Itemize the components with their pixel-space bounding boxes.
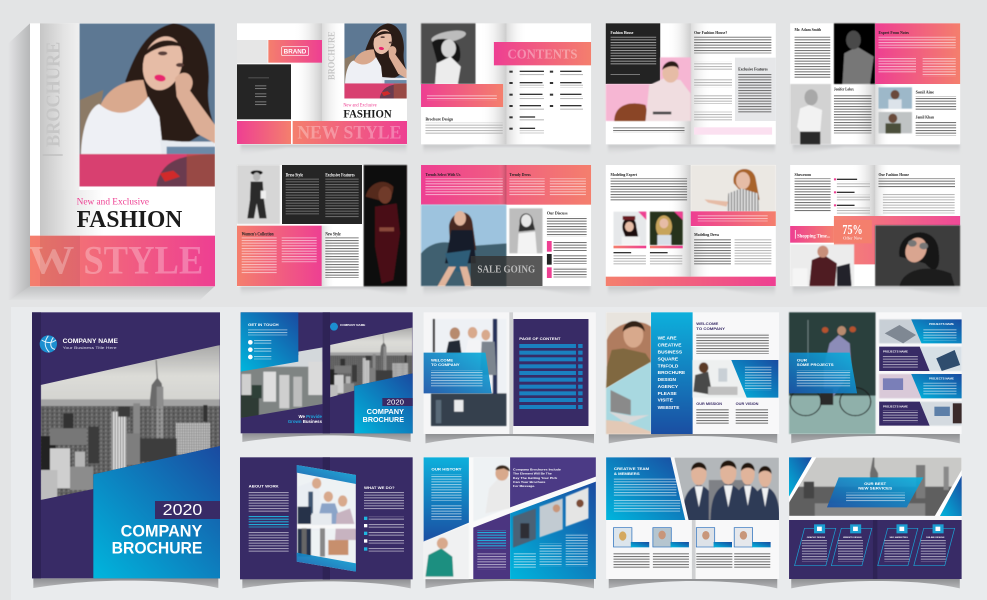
year block — [155, 501, 220, 519]
body text — [611, 178, 687, 201]
white article text: New Style — [325, 232, 341, 237]
left city photo — [241, 347, 323, 418]
left gradient band — [237, 121, 291, 144]
slogan: We Provide — [298, 414, 323, 419]
cover shadow — [8, 23, 215, 300]
contents rows — [519, 344, 583, 409]
page — [606, 457, 779, 579]
gradient band — [30, 236, 215, 286]
about work text: ABOUT WORK — [249, 485, 279, 489]
shopper photo — [790, 244, 854, 286]
band text: NEW STYLE — [297, 122, 401, 143]
project tile three: PROJECTS NAME — [929, 377, 954, 381]
subtitle: New and Exclusive — [343, 104, 377, 109]
purple top panel: Key The Getting Your Pick — [513, 476, 558, 480]
company name: COMPANY NAME — [63, 339, 118, 345]
year block: 2020 — [163, 502, 202, 519]
year block: 2020 — [387, 400, 404, 407]
dark model photo — [364, 165, 407, 286]
intro text — [795, 37, 830, 78]
spread: we are creative — [606, 312, 779, 443]
model card two bar — [650, 246, 683, 248]
blue overlay — [424, 353, 492, 393]
spread: projects — [789, 312, 962, 443]
company name — [63, 339, 118, 350]
column text: TRIFOLD — [658, 364, 679, 368]
project tile four — [879, 402, 962, 426]
blue lower panel — [510, 482, 596, 579]
year block — [382, 398, 413, 407]
slogan: Grown Business — [288, 419, 323, 424]
fashion house text — [878, 172, 955, 213]
dark article panel — [282, 165, 362, 224]
tab items — [547, 241, 587, 278]
woman and car photo — [421, 205, 506, 286]
fold shading — [293, 23, 344, 121]
fold — [668, 165, 711, 277]
cover photo — [79, 23, 215, 187]
brand block: BRAND — [284, 48, 307, 55]
blue overlay — [789, 353, 857, 393]
man at board photo — [473, 457, 510, 522]
page — [424, 312, 596, 434]
fold — [873, 520, 877, 579]
column text: SQUARE — [658, 357, 678, 361]
subtitle: New and Exclusive — [77, 197, 149, 208]
welcome text — [696, 333, 769, 354]
spine — [32, 312, 41, 578]
shadow — [423, 286, 590, 297]
top-left corner — [789, 457, 812, 497]
discount box: Offer Now — [843, 236, 863, 240]
mission and vision — [696, 402, 768, 424]
quote — [613, 127, 685, 133]
service one: GRAPHIC DESIGN — [807, 536, 826, 539]
page — [790, 23, 960, 144]
about text — [425, 123, 503, 134]
column text: BUSINESS — [658, 350, 682, 354]
title: BROCHURE — [363, 417, 404, 424]
welcome text: TO COMPANY — [431, 363, 460, 367]
blue contact panel — [241, 312, 298, 372]
purple top panel: Company Brochures Include — [513, 467, 561, 471]
mission and vision: OUR MISSION — [696, 402, 723, 406]
fold — [480, 23, 527, 144]
title — [112, 522, 202, 558]
model card one — [614, 212, 646, 245]
project tile two: PROJECTS NAME — [883, 349, 908, 353]
people photo — [606, 312, 651, 434]
office photo — [297, 465, 356, 572]
column text — [658, 336, 685, 410]
laptop photo — [606, 362, 651, 434]
pink band — [834, 216, 960, 264]
heading: Modeling Expert — [611, 172, 637, 177]
heading: Our Fashion House? — [694, 30, 727, 35]
page — [789, 312, 962, 434]
model card two — [650, 212, 683, 245]
fashion brochure group — [8, 23, 960, 300]
column text: WE ARE — [658, 336, 677, 341]
gradient panel: Expert From Notes — [878, 30, 909, 35]
project tile one: PROJECTS NAME — [929, 322, 954, 326]
title FASHION: FASHION — [77, 206, 183, 233]
column text: VISITE — [658, 398, 673, 403]
top-left white stripe — [789, 457, 816, 503]
service three: SEO MARKETING — [890, 536, 908, 539]
photo strip — [513, 487, 588, 548]
body text — [694, 37, 771, 53]
top strip — [297, 465, 356, 484]
discount box — [834, 220, 872, 243]
fold — [852, 84, 890, 144]
purple top panel: For Message. — [513, 484, 535, 488]
service three — [878, 524, 918, 566]
purple top panel: Can Your Brochure — [513, 480, 546, 484]
vertical word BROCHURE: BROCHURE — [42, 42, 64, 147]
blue history panel — [424, 457, 469, 542]
welcome heading: WELCOME — [696, 322, 719, 326]
spread: about work — [240, 457, 413, 588]
blue callout — [731, 360, 778, 398]
welcome text — [431, 358, 482, 387]
bullet list — [364, 517, 404, 552]
shadow — [241, 286, 407, 296]
city photo — [41, 345, 220, 502]
corporate cover — [32, 312, 220, 588]
model card one bar — [614, 246, 646, 248]
sale going overlay: SALE GOING — [477, 265, 535, 275]
fashion cover — [8, 23, 215, 300]
blue title parallelogram: NEW SERVICES — [858, 487, 893, 491]
page — [421, 23, 591, 144]
right gradient band — [293, 121, 407, 144]
shadow — [425, 434, 594, 443]
contents banner: CONTENTS — [508, 47, 577, 62]
photo — [344, 23, 407, 98]
mission and vision: OUR VISION — [736, 402, 759, 406]
project tile one — [879, 319, 962, 343]
black and white photo — [421, 23, 476, 84]
shadow — [33, 578, 218, 588]
spread: shopping offer — [790, 165, 960, 297]
blue team panel — [606, 457, 685, 520]
cyclist photo — [789, 312, 876, 434]
pink photo — [606, 57, 691, 121]
purple top panel: The Element Will Be The — [513, 472, 552, 476]
quote block — [421, 84, 503, 107]
captions — [614, 252, 682, 265]
spread: contents — [421, 23, 591, 155]
page — [424, 457, 596, 579]
modeling dress heading: Modeling Dress — [694, 232, 719, 237]
blue team panel: CREATIVE TEAM — [614, 467, 649, 471]
rule under BROCHURE — [43, 154, 63, 156]
team photo — [674, 457, 780, 525]
name and bio — [834, 87, 871, 133]
shadow — [791, 434, 960, 443]
fashion house text: Our Fashion House — [878, 172, 909, 177]
grey block — [237, 40, 268, 63]
column text: DESIGN — [658, 377, 676, 382]
title — [363, 409, 404, 424]
page — [237, 165, 407, 286]
showroom text — [795, 172, 831, 212]
member text — [614, 552, 770, 569]
title: BROCHURE — [112, 540, 202, 558]
title: COMPANY — [367, 409, 404, 416]
blue team panel: & MEMBERS — [614, 472, 640, 476]
small portrait two — [878, 112, 912, 133]
black and white photo — [509, 208, 542, 253]
slogan — [288, 414, 323, 424]
page — [237, 23, 407, 144]
shadow — [793, 144, 960, 155]
grey portrait — [790, 84, 831, 144]
lower spine shadow — [40, 190, 103, 236]
dark contact panel — [237, 64, 291, 119]
blue history panel: OUR HISTORY — [431, 468, 462, 472]
shadow — [425, 579, 594, 588]
sunglasses portrait — [875, 225, 960, 286]
dark portrait — [834, 23, 875, 84]
strip columns text — [514, 533, 588, 569]
footer bar — [606, 277, 776, 286]
shadow — [423, 144, 590, 155]
shadow — [609, 434, 777, 443]
office photo — [431, 319, 506, 426]
dark article panel: Exclusive Features — [325, 174, 355, 179]
page — [421, 165, 591, 286]
cover base — [32, 312, 220, 578]
project tile two — [879, 347, 962, 371]
blue panel — [93, 446, 220, 578]
discount box: 75% — [842, 223, 863, 238]
bottom strip — [297, 553, 356, 572]
projects text: SOME PROJECTS — [797, 363, 834, 367]
band text NEW STYLE: W — [28, 237, 75, 282]
service two — [831, 524, 872, 566]
bottom-right corner — [940, 476, 962, 516]
logo — [40, 335, 57, 353]
purple contents panel — [513, 319, 588, 426]
band spine shade — [40, 236, 80, 286]
profile text: Sonil Aine — [916, 90, 934, 94]
small portrait one — [878, 87, 912, 109]
fold — [692, 520, 696, 579]
spread: fashion house — [606, 23, 776, 155]
service four — [914, 524, 955, 566]
spread: team profiles — [790, 23, 960, 155]
showroom text: Showroom — [795, 172, 811, 177]
about work text — [249, 485, 289, 552]
contents list — [509, 71, 583, 133]
member cards — [614, 528, 771, 547]
shadow — [242, 579, 411, 588]
spread: trendy dress and sale — [421, 165, 591, 297]
fold — [509, 312, 513, 434]
bullets — [834, 178, 870, 214]
spine shading — [40, 23, 79, 190]
page — [606, 23, 776, 144]
woman presenting photo — [691, 165, 776, 211]
projects text: OUR — [797, 358, 807, 362]
blue title parallelogram: OUR BEST — [864, 482, 887, 486]
fold — [852, 165, 890, 216]
profile text — [916, 90, 956, 136]
shadow — [242, 433, 411, 442]
corporate brochure group — [32, 312, 962, 588]
projects text — [797, 358, 850, 387]
service four: ONLINE DESIGN — [926, 537, 945, 539]
brand block — [268, 40, 322, 63]
dark text panel — [606, 23, 660, 84]
gradient panel — [875, 23, 960, 84]
fold — [668, 23, 711, 144]
page — [606, 165, 776, 286]
base — [240, 457, 413, 579]
column text: PLEASE — [658, 391, 677, 396]
name heading: Mr. Adam Smith — [795, 27, 821, 32]
discuss heading: Our Discuss — [547, 211, 568, 216]
bottom-right white stripe — [935, 470, 962, 516]
spread: dress style and collection — [237, 165, 407, 296]
shadow — [609, 579, 777, 588]
logo: COMPANY NAME — [340, 324, 366, 327]
column text: CREATIVE — [658, 343, 681, 348]
band text NEW STYLE — [30, 246, 202, 274]
spread: new services — [789, 457, 962, 588]
title: COMPANY — [121, 522, 202, 540]
what we do text — [364, 486, 404, 510]
grey box: Exclusive Features — [738, 67, 768, 72]
column text: AGENCY — [658, 384, 678, 389]
about heading: Brochure Design — [425, 117, 453, 122]
gradient header — [421, 165, 591, 205]
project tile four: PROJECTS NAME — [883, 404, 908, 408]
fold — [322, 226, 335, 286]
purple top panel — [510, 457, 596, 507]
blue contact panel: GET IN TOUCH — [248, 322, 279, 327]
shopping banner: Shopping Time... — [797, 235, 831, 240]
page — [606, 312, 779, 434]
dark article panel: Dress Style — [286, 174, 304, 179]
model photo grey — [237, 165, 280, 224]
service two: WEBSITE DESIGN — [843, 537, 862, 539]
shopping banner — [790, 226, 834, 243]
shadow — [793, 286, 960, 297]
column text: BROCHURE — [658, 370, 685, 375]
spread: brand and new style — [237, 23, 407, 155]
two columns of text — [694, 238, 771, 265]
what we do text: WHAT WE DO? — [364, 486, 396, 490]
shadow — [608, 286, 775, 297]
city photo — [789, 457, 962, 516]
name and bio: Jonifer Lolux — [834, 87, 854, 91]
shadow — [608, 144, 775, 155]
service one — [795, 524, 836, 566]
contents heading: PAGE OF CONTENT — [519, 337, 561, 341]
right city photo — [330, 327, 413, 399]
blue title panel — [354, 373, 413, 433]
page — [789, 457, 962, 579]
logo — [330, 323, 366, 331]
project tile three — [879, 374, 962, 398]
dark text panel: Fashion House — [611, 30, 633, 35]
numbered list — [694, 62, 732, 121]
purple services panel — [789, 520, 962, 579]
vertical word: BROCHURE — [327, 31, 337, 80]
blue title parallelogram — [827, 477, 923, 507]
woman photo — [424, 524, 469, 579]
sale going overlay — [471, 256, 542, 286]
spread: page of content — [424, 312, 596, 443]
page — [790, 165, 960, 286]
white article text — [325, 232, 359, 278]
blue column — [651, 312, 693, 434]
spread: creative team — [606, 457, 780, 588]
shadow — [791, 579, 960, 588]
coral quote — [691, 211, 776, 226]
spread: our history — [424, 457, 596, 588]
spread: get in touch — [241, 312, 413, 442]
discuss text — [547, 217, 587, 237]
contents banner — [494, 42, 591, 65]
welcome heading — [696, 322, 725, 331]
pale pink bar — [694, 127, 772, 135]
lower background panel — [11, 307, 987, 600]
office photo — [693, 360, 747, 398]
band text NEW STYLE: STYLE — [83, 237, 203, 282]
fold — [323, 457, 330, 579]
cover page — [30, 23, 215, 287]
fold — [323, 312, 330, 433]
welcome heading: TO COMPANY — [696, 327, 725, 331]
column text: WEBSITE — [658, 405, 679, 410]
gradient article panel: Women's Collection — [242, 232, 274, 237]
company name: Your Business Title Here — [63, 345, 118, 350]
spread: modeling expert — [606, 165, 776, 297]
title: FASHION — [343, 108, 392, 120]
grey box — [735, 58, 776, 121]
welcome text: WELCOME — [431, 358, 454, 362]
base — [241, 312, 413, 433]
shadow — [241, 144, 407, 155]
gradient header: Trendy Dress — [509, 172, 531, 177]
gradient header: Trends Select With Us — [425, 172, 461, 177]
purple lower panel — [473, 513, 510, 579]
gradient article panel — [237, 226, 322, 286]
profile text: Jamil Khan — [916, 115, 934, 119]
